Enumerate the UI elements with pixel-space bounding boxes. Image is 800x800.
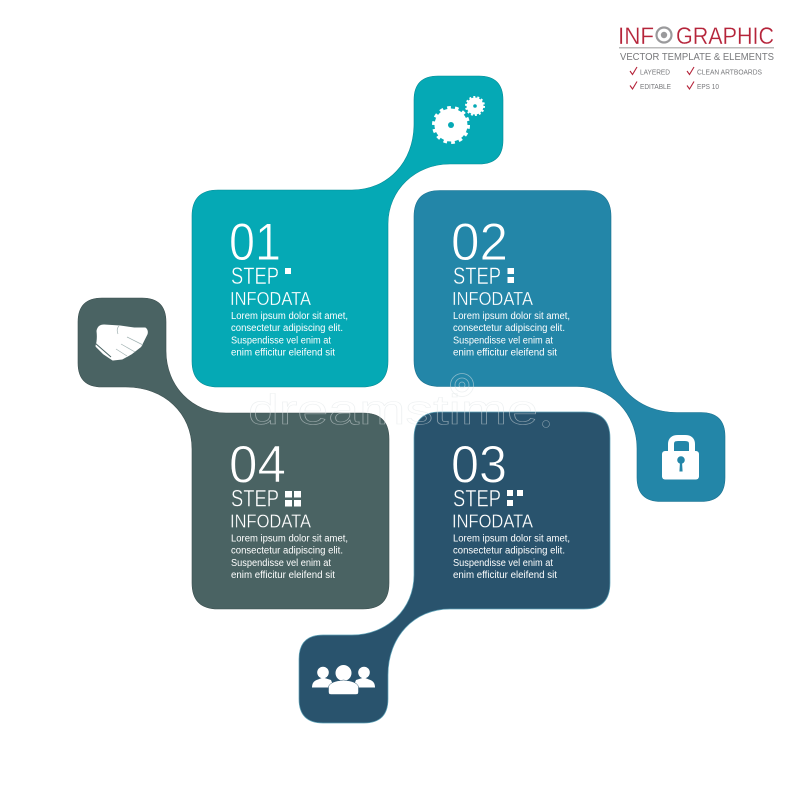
text block 04: Suspendisse vel enim at bbox=[231, 558, 331, 569]
text block 03: 03 bbox=[451, 436, 507, 494]
icon: gears bbox=[434, 97, 484, 142]
logo wordmark: GRAPHIC bbox=[676, 23, 774, 50]
text block 02: Suspendisse vel enim at bbox=[453, 336, 553, 346]
panel: step 02 bbox=[414, 190, 725, 502]
text block 02: INFODATA bbox=[452, 289, 533, 309]
text block 04: consectetur adipiscing elit. bbox=[231, 546, 343, 556]
panel shape 04 with connector tab bbox=[78, 298, 389, 609]
text block 03: enim efficitur eleifend sit bbox=[453, 570, 557, 581]
text block 04: INFODATA bbox=[230, 512, 311, 532]
text block 03: consectetur adipiscing elit. bbox=[453, 546, 565, 556]
text block 01: INFODATA bbox=[230, 289, 311, 309]
text block 01: Lorem ipsum dolor sit amet, bbox=[231, 311, 348, 322]
text block 01: consectetur adipiscing elit. bbox=[231, 323, 343, 334]
text block 04: STEP bbox=[231, 486, 279, 512]
text block 03: Lorem ipsum dolor sit amet, bbox=[453, 534, 570, 544]
logo checklist: EDITABLE bbox=[640, 84, 671, 91]
panel shape 02 with connector tab bbox=[414, 190, 725, 502]
text block 03 bbox=[451, 436, 570, 581]
text block 02: consectetur adipiscing elit. bbox=[453, 323, 565, 334]
logo: infographic vector template bbox=[618, 23, 774, 91]
logo checklist bbox=[630, 67, 762, 91]
text block 01: STEP bbox=[231, 263, 279, 290]
text block 02: STEP bbox=[453, 263, 501, 290]
logo wordmark: INF bbox=[618, 23, 654, 50]
panel: step 03 bbox=[299, 412, 610, 723]
logo checklist: EPS 10 bbox=[697, 84, 719, 91]
text block 01: enim efficitur eleifend sit bbox=[231, 348, 335, 358]
text block 04 bbox=[229, 436, 348, 581]
panel shape 01 with connector tab bbox=[192, 76, 503, 387]
logo checklist: CLEAN ARTBOARDS bbox=[697, 70, 762, 76]
panel: step 01 bbox=[192, 76, 503, 387]
logo target icon bbox=[656, 28, 672, 42]
icon: handshake bbox=[95, 326, 146, 359]
text block 02 bbox=[451, 213, 570, 358]
panel: step 04 bbox=[78, 298, 389, 609]
logo checklist: LAYERED bbox=[640, 70, 670, 76]
text block 02: Lorem ipsum dolor sit amet, bbox=[453, 311, 570, 322]
watermark: dreamstime bbox=[248, 374, 550, 433]
text block 03: STEP bbox=[453, 486, 501, 512]
watermark: dreamstime: dreamstime bbox=[248, 386, 538, 433]
text block 03: Suspendisse vel enim at bbox=[453, 558, 553, 569]
text block 02: 02 bbox=[451, 213, 508, 272]
text block 04: 04 bbox=[229, 436, 286, 494]
text block 01: 01 bbox=[229, 213, 281, 272]
logo subtitle: VECTOR TEMPLATE & ELEMENTS bbox=[620, 52, 774, 63]
icon: padlock bbox=[662, 438, 699, 480]
text block 02: enim efficitur eleifend sit bbox=[453, 348, 557, 358]
text block 03: INFODATA bbox=[452, 512, 533, 532]
text block 01: Suspendisse vel enim at bbox=[231, 336, 331, 346]
panel shape 03 with connector tab bbox=[299, 412, 610, 723]
icon: people group bbox=[312, 665, 375, 694]
text block 04: enim efficitur eleifend sit bbox=[231, 570, 335, 581]
logo wordmark bbox=[618, 23, 774, 50]
text block 01 bbox=[229, 213, 348, 358]
text block 04: Lorem ipsum dolor sit amet, bbox=[231, 534, 348, 544]
